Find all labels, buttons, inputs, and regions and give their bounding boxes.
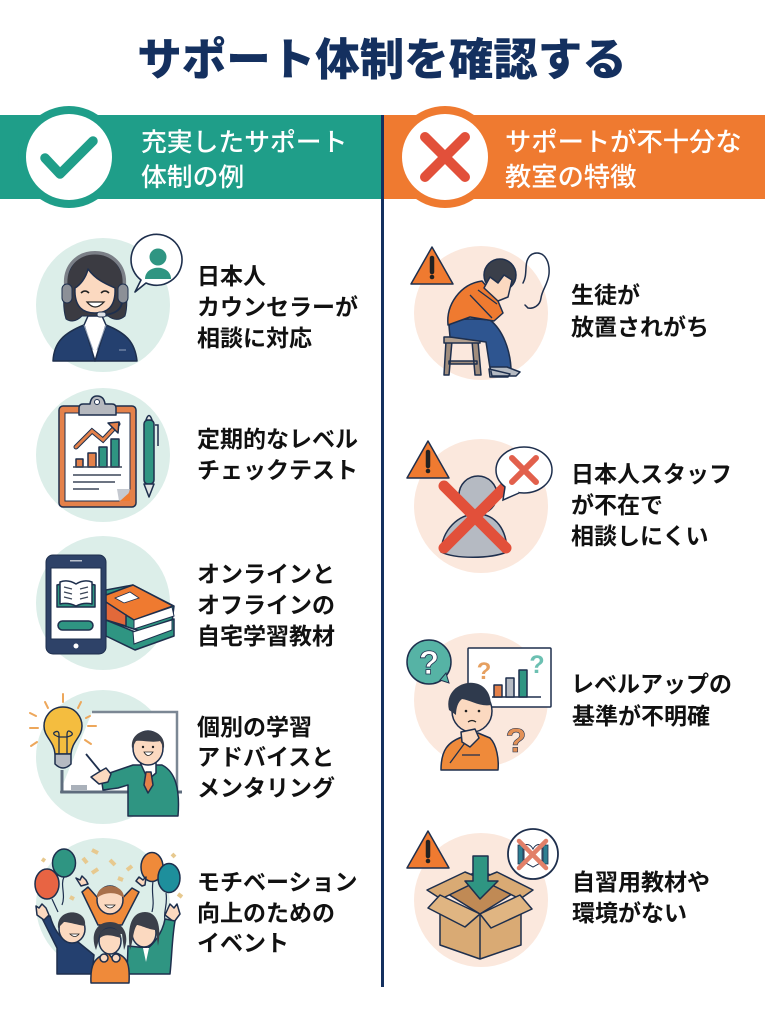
- text: counselor: 日本人: [197, 263, 266, 289]
- text: home study materials: [197, 561, 335, 649]
- icon: unclear level-up standards: ?: [506, 722, 526, 760]
- text: no staff: 相談しにくい: [571, 523, 709, 549]
- text: mentoring: アドバイスと: [197, 744, 334, 770]
- panel header: poor support: 教室の特徴: [505, 162, 636, 192]
- panel header: good support: 体制の例: [141, 163, 244, 192]
- text: home study materials: 自宅学習教材: [197, 623, 335, 649]
- text: no staff: が不在で: [571, 492, 663, 518]
- center divider: [381, 115, 384, 987]
- icon: unclear level-up standards: ?: [419, 644, 439, 681]
- icon: celebrating group with balloons: [35, 838, 182, 983]
- panel header: poor support: [384, 106, 765, 208]
- text: mentoring: 個別の学習: [197, 714, 312, 740]
- text: no materials: 自習用教材や: [572, 869, 710, 895]
- icon: counselor with headset: [36, 234, 182, 372]
- text: motivation events: モチベーション: [197, 869, 358, 895]
- text: level test: 定期的なレベル: [197, 426, 358, 452]
- text: unclear standards: 基準が不明確: [572, 703, 710, 729]
- text: neglected: [571, 282, 709, 340]
- text: home study materials: オフラインの: [197, 592, 335, 618]
- panel header: good support: [0, 106, 381, 208]
- text: motivation events: 向上のための: [197, 900, 335, 926]
- icon: no Japanese staff: [407, 439, 552, 573]
- text: no staff: 日本人スタッフ: [571, 461, 732, 487]
- text: level test: チェックテスト: [197, 457, 358, 483]
- icon: empty box and no books: [407, 829, 558, 967]
- text: home study materials: オンラインと: [197, 561, 335, 587]
- text: neglected: 生徒が: [571, 282, 640, 308]
- text: neglected: 放置されがち: [571, 314, 709, 340]
- icon: unclear level-up standards: ?: [529, 651, 545, 679]
- icon: smartphone and books: [36, 536, 174, 670]
- icon: neglected student: [411, 246, 549, 380]
- text: level test: [197, 426, 358, 483]
- text: unclear standards: レベルアップの: [571, 671, 732, 697]
- text: counselor: 相談に対応: [197, 325, 312, 351]
- text: motivation events: イベント: [197, 930, 289, 956]
- text: no staff: [571, 461, 732, 549]
- text: mentoring: [197, 714, 335, 801]
- title: サポート体制を確認する: [137, 35, 627, 85]
- panel header: good support: 充実したサポート: [141, 128, 347, 157]
- text: no materials: [572, 869, 710, 926]
- panel header: poor support: サポートが不十分な: [505, 127, 742, 157]
- text: counselor: [197, 263, 358, 351]
- icon: clipboard with growth chart and pen: [36, 388, 170, 522]
- text: counselor: カウンセラーが: [197, 294, 358, 320]
- text: unclear standards: [571, 671, 732, 729]
- icon: unclear level-up standards: ?: [477, 658, 491, 685]
- text: motivation events: [197, 869, 358, 956]
- text: no materials: 環境がない: [572, 900, 687, 926]
- icon: unclear level-up standards: [407, 633, 551, 770]
- text: mentoring: メンタリング: [197, 775, 335, 801]
- icon: light bulb and mentor at whiteboard: [30, 690, 182, 824]
